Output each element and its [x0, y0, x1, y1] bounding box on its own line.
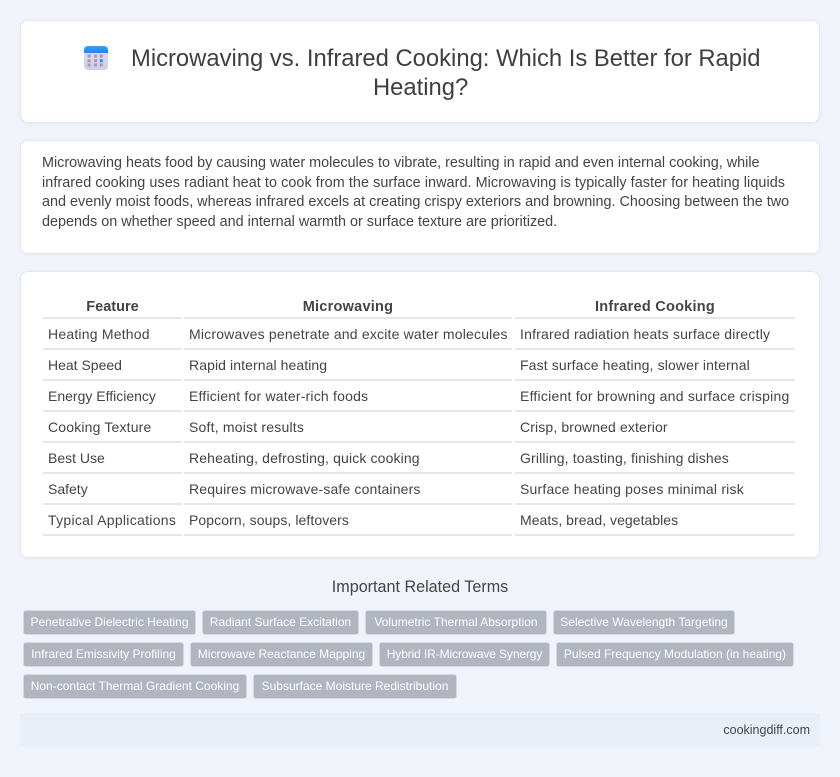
comparison table: Microwaves penetrate and excite water molecules — [189, 326, 508, 342]
panel: comparison table — [20, 271, 820, 558]
summary text: depends on whether speed and internal warmth or surface texture are prioritized. — [42, 214, 557, 230]
tag list: Hybrid IR-Microwave Synergy — [387, 647, 542, 661]
summary text — [42, 155, 789, 230]
title: Microwaving vs. Infrared Cooking: Which Is Better for Rapid — [131, 45, 761, 72]
comparison table: Microwaving — [303, 299, 393, 315]
comparison table: Soft, moist results — [189, 419, 304, 435]
comparison table: Safety — [48, 481, 88, 497]
comparison table: Efficient for water-rich foods — [189, 388, 368, 404]
comparison table: Heat Speed — [48, 357, 122, 373]
comparison table: Infrared Cooking — [595, 299, 715, 315]
heading: related terms: Important Related Terms — [332, 578, 508, 596]
comparison table: Meats, bread, vegetables — [520, 512, 678, 528]
icon: calendar — [84, 46, 108, 70]
tag list — [23, 610, 794, 699]
comparison table: Reheating, defrosting, quick cooking — [189, 450, 420, 466]
comparison table: Fast surface heating, slower internal — [520, 357, 750, 373]
comparison table: Best Use — [48, 450, 105, 466]
comparison table: Feature — [86, 299, 139, 315]
source credit: cookingdiff.com — [723, 723, 810, 737]
summary text: Microwaving heats food by causing water molecules to vibrate, resulting in rapid and even internal cooking, while — [42, 155, 760, 171]
comparison table: Grilling, toasting, finishing dishes — [520, 450, 729, 466]
panel: summary — [20, 140, 820, 254]
tag list: Infrared Emissivity Profiling — [31, 647, 176, 661]
comparison table: Typical Applications — [48, 512, 176, 528]
comparison table: Infrared radiation heats surface directly — [520, 326, 770, 342]
tag list: Pulsed Frequency Modulation (in heating) — [564, 647, 786, 661]
footer — [20, 713, 820, 747]
comparison table: Rapid internal heating — [189, 357, 327, 373]
title: Heating? — [373, 74, 468, 101]
panel: title card — [20, 20, 820, 123]
tag list: Non-contact Thermal Gradient Cooking — [31, 679, 239, 693]
tag list: Volumetric Thermal Absorption — [374, 615, 538, 629]
tag list: Microwave Reactance Mapping — [198, 647, 365, 661]
comparison table: Crisp, browned exterior — [520, 419, 668, 435]
summary text: and evenly moist foods, whereas infrared excels at creating crispy exteriors and browning. Choosing between the two — [42, 194, 789, 210]
comparison table: Energy Efficiency — [48, 388, 156, 404]
comparison table: Popcorn, soups, leftovers — [189, 512, 349, 528]
comparison table: Cooking Texture — [48, 419, 151, 435]
tag list: Subsurface Moisture Redistribution — [262, 679, 448, 693]
comparison table: Requires microwave-safe containers — [189, 481, 421, 497]
tag list: Radiant Surface Excitation — [210, 615, 351, 629]
comparison table: Efficient for browning and surface crisping — [520, 388, 790, 404]
comparison table — [43, 299, 795, 536]
tag list: Selective Wavelength Targeting — [560, 615, 728, 629]
comparison table: Surface heating poses minimal risk — [520, 481, 744, 497]
tag list: Penetrative Dielectric Heating — [30, 615, 189, 629]
title — [131, 45, 761, 101]
comparison table: Heating Method — [48, 326, 150, 342]
summary text: infrared cooking uses radiant heat to cook from the surface inward. Microwaving is typically faster for heating liquids — [42, 174, 785, 190]
